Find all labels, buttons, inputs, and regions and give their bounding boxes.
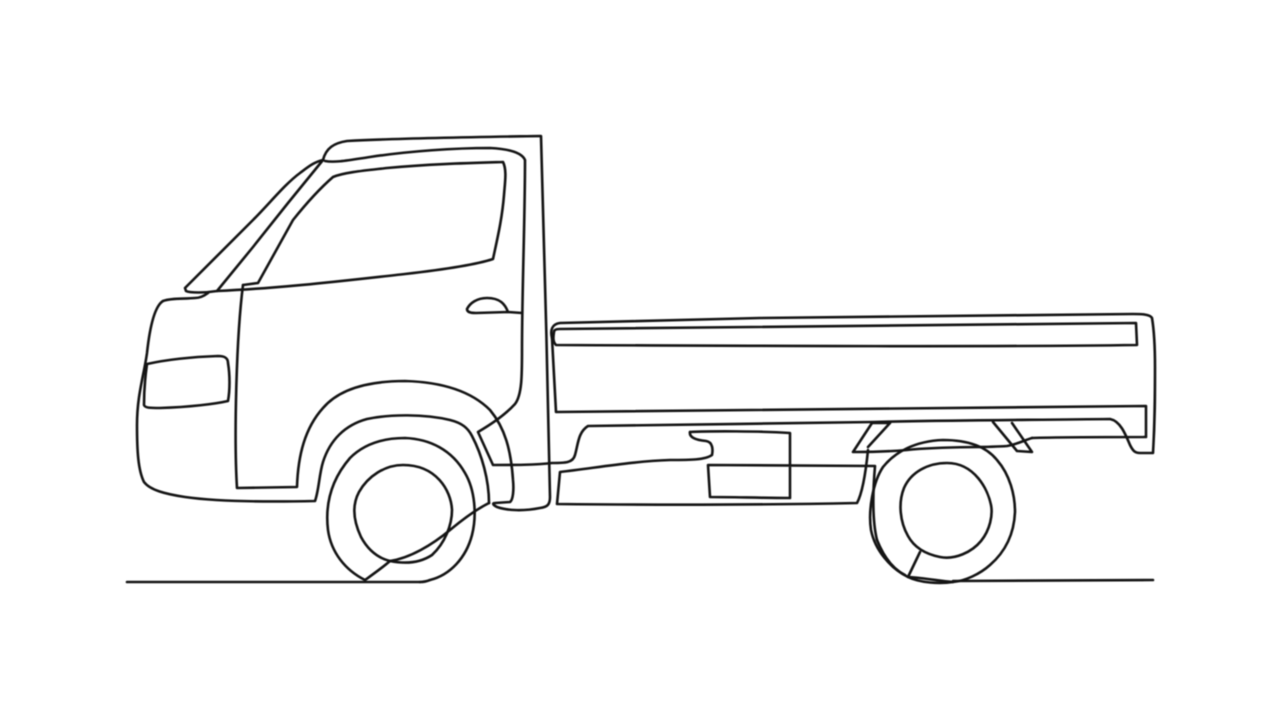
front wheel tyre xyxy=(327,438,475,582)
headlamp xyxy=(144,356,230,408)
front wheel hub and stroke xyxy=(354,465,489,580)
rear wheel hub and stroke xyxy=(877,463,992,582)
cab roof and rear cab edge xyxy=(236,136,550,510)
fuel tank and underbody box xyxy=(557,431,877,540)
cargo bed top rail xyxy=(553,323,1137,346)
door handle xyxy=(467,298,522,313)
hood and front bumper xyxy=(137,293,489,503)
ground line xyxy=(127,580,1153,582)
side window and door seam xyxy=(217,162,505,291)
bed support bracket: rear xyxy=(993,422,1032,452)
door frame and chassis sill xyxy=(325,148,1155,465)
windshield and pillar xyxy=(185,160,323,292)
rear wheel tyre xyxy=(870,440,1015,583)
bed support bracket: front xyxy=(853,423,1032,452)
cargo bed side panel xyxy=(552,338,1146,438)
